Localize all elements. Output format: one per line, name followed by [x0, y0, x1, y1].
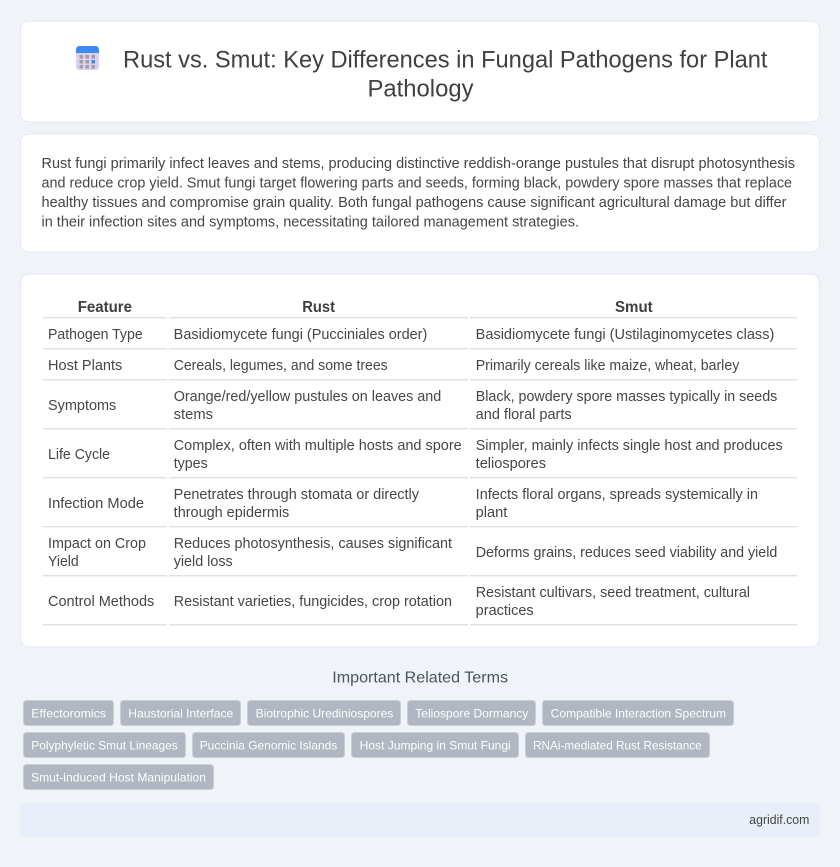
row: life cycle — [43, 438, 797, 478]
tag list: related terms — [24, 700, 734, 790]
tag: Compatible Interaction Spectrum — [551, 706, 726, 720]
row: life cycle: Life Cycle — [48, 447, 110, 463]
row: symptoms — [43, 389, 797, 429]
row: pathogen type — [43, 327, 797, 349]
tag: Teliospore Dormancy — [415, 706, 528, 720]
row: symptoms: Symptoms — [48, 398, 116, 414]
row: control methods: Resistant varieties, fungicides, crop rotation — [174, 594, 452, 610]
row: impact on crop yield — [43, 536, 797, 576]
title — [123, 46, 768, 102]
row: infection mode: Infection Mode — [48, 496, 144, 512]
panel: summary paragraph: Rust fungi primarily infect leaves and stems, producing distinctive reddish-orange pustules that disrupt photosynthesis — [42, 156, 795, 172]
tag — [24, 732, 186, 758]
tag — [120, 700, 240, 726]
row: host plants: Primarily cereals like maize, wheat, barley — [476, 358, 740, 374]
tag: Polyphyletic Smut Lineages — [31, 738, 178, 752]
panel: summary paragraph: in their infection sites and symptoms, necessitating tailored management strategies. — [42, 214, 579, 230]
tag — [24, 764, 214, 790]
row: control methods: practices — [476, 603, 534, 619]
tag — [542, 700, 734, 726]
row: host plants: Cereals, legumes, and some trees — [174, 358, 388, 374]
panel: header card — [20, 21, 820, 122]
tag: Effectoromics — [31, 706, 106, 720]
panel: summary paragraph — [20, 134, 820, 252]
row: pathogen type: Basidiomycete fungi (Pucciniales order) — [174, 327, 427, 343]
row: impact on crop yield: Yield — [48, 554, 79, 570]
title: Pathology — [368, 76, 474, 102]
row: pathogen type: Pathogen Type — [48, 327, 143, 343]
row: symptoms: Orange/red/yellow pustules on leaves and — [174, 389, 441, 405]
tag: Biotrophic Urediniospores — [256, 706, 393, 720]
row: pathogen type: Basidiomycete fungi (Ustilaginomycetes class) — [476, 327, 774, 343]
row: control methods: Resistant cultivars, seed treatment, cultural — [476, 585, 750, 601]
tag — [24, 700, 114, 726]
tag: Haustorial Interface — [128, 706, 234, 720]
row: control methods — [43, 585, 797, 625]
icon: calendar — [76, 46, 99, 70]
row: life cycle: types — [174, 456, 208, 472]
row: impact on crop yield: Deforms grains, reduces seed viability and yield — [476, 545, 777, 561]
row: infection mode: Infects floral organs, spreads systemically in — [476, 487, 758, 503]
table header row: Smut — [615, 299, 653, 316]
tag: Puccinia Genomic Islands — [200, 738, 337, 752]
panel: comparison table — [20, 274, 820, 647]
row: symptoms: stems — [174, 407, 213, 423]
row: symptoms: Black, powdery spore masses typically in seeds — [476, 389, 777, 405]
row: control methods: Control Methods — [48, 594, 154, 610]
row: life cycle: Complex, often with multiple hosts and spore — [174, 438, 462, 454]
row: impact on crop yield: Reduces photosynthesis, causes significant — [174, 536, 452, 552]
panel: summary paragraph: and reduce crop yield. Smut fungi target flowering parts and seeds, forming black, powdery spore masses that replace — [42, 176, 792, 192]
table header row: Feature — [78, 299, 132, 316]
tag: Host Jumping in Smut Fungi — [360, 738, 511, 752]
tag: RNAi-mediated Rust Resistance — [533, 738, 702, 752]
tag — [352, 732, 518, 758]
row: host plants: Host Plants — [48, 358, 122, 374]
tag — [248, 700, 400, 726]
title: Rust vs. Smut: Key Differences in Fungal Pathogens for Plant — [123, 46, 768, 74]
row: infection mode: Penetrates through stomata or directly — [174, 487, 420, 503]
row: life cycle: Simpler, mainly infects single host and produces — [476, 438, 783, 454]
row: host plants — [43, 358, 797, 380]
row: infection mode: plant — [476, 505, 507, 521]
tag — [408, 700, 536, 726]
panel: summary paragraph: healthy tissues and compromise grain quality. Both fungal pathogens cause significant agricultural damage but differ — [42, 195, 787, 211]
row: infection mode: through epidermis — [174, 505, 289, 521]
row: life cycle: teliospores — [476, 456, 546, 472]
footer bar: agridif.com — [749, 812, 809, 827]
row: symptoms: and floral parts — [476, 407, 572, 423]
table header row: Rust — [302, 299, 336, 316]
tag — [192, 732, 344, 758]
heading: important related terms: Important Related Terms — [332, 670, 508, 686]
footer bar — [20, 803, 820, 837]
tag — [526, 732, 710, 758]
table header row — [43, 299, 797, 318]
row: infection mode — [43, 487, 797, 527]
row: impact on crop yield: yield loss — [174, 554, 233, 570]
tag: Smut-induced Host Manipulation — [31, 770, 206, 784]
row: impact on crop yield: Impact on Crop — [48, 536, 146, 552]
